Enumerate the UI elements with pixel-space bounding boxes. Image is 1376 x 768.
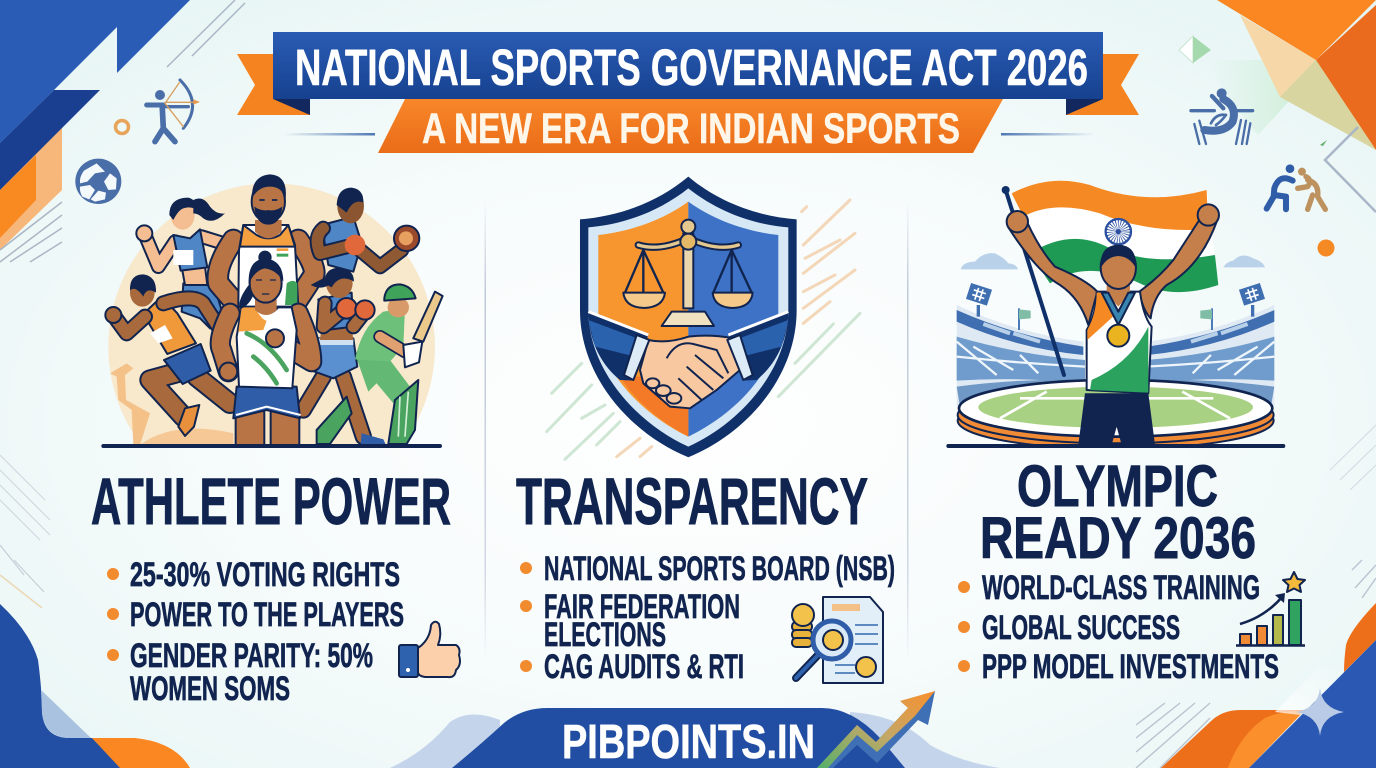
ground line	[103, 440, 440, 452]
bullet list: WOMEN SOMS	[130, 670, 290, 708]
motion stripes	[547, 200, 860, 459]
athletics track and field	[958, 380, 1274, 449]
handshake	[588, 310, 788, 408]
scales of justice	[623, 220, 753, 326]
corner decoration: bottom left	[0, 455, 190, 768]
corner decoration: top right	[1179, 0, 1376, 256]
bullet list	[520, 550, 895, 686]
bullet list: 25-30% VOTING RIGHTS	[130, 556, 400, 594]
ground line	[948, 440, 1283, 452]
bullet list	[958, 569, 1279, 686]
bullet list: ELECTIONS	[544, 616, 666, 654]
bullet list	[107, 556, 404, 708]
heading: OLYMPIC	[1017, 454, 1218, 519]
icon: gymnast	[1191, 88, 1253, 144]
Indian flag	[1012, 181, 1218, 292]
subtitle text: A NEW ERA FOR INDIAN SPORTS	[422, 105, 960, 153]
illustration: olympic athlete with flag	[948, 181, 1283, 449]
icon: football	[75, 159, 121, 204]
panel: olympic ready 2036: READY 2036	[980, 506, 1256, 571]
bullet list: NATIONAL SPORTS BOARD (NSB)	[544, 550, 895, 588]
panel: olympic ready 2036	[958, 454, 1305, 686]
bullet list: GLOBAL SUCCESS	[982, 609, 1180, 647]
icon: thumbs up	[399, 622, 460, 677]
corner decoration: bottom right	[1136, 560, 1376, 768]
figure: front female athlete	[219, 251, 312, 450]
illustration: athletes group	[103, 174, 443, 450]
icon: wrestlers	[1267, 164, 1325, 209]
bullet list: FAIR FEDERATION	[544, 588, 740, 626]
monument silhouette	[110, 363, 150, 445]
athlete	[1007, 204, 1219, 445]
heading: TRANSPARENCY	[516, 464, 868, 538]
decorative lines on right edge	[1330, 425, 1376, 490]
heading: ATHLETE POWER	[91, 464, 451, 538]
figure: bearded athlete	[218, 174, 314, 307]
icon: audit document with magnifier	[792, 597, 883, 683]
background sun	[108, 183, 435, 445]
figure: boxer	[303, 268, 386, 445]
illustration: shield with scales and handshake	[547, 177, 860, 459]
icon: archer	[147, 80, 200, 142]
panel: athlete power	[91, 464, 460, 708]
decorative orange ring	[116, 120, 128, 134]
figure: ball thrower	[317, 188, 419, 272]
bullet list: GENDER PARITY: 50%	[130, 637, 373, 675]
clouds	[961, 253, 1265, 269]
figure: male runner	[105, 274, 230, 436]
Ashoka chakra	[1106, 219, 1131, 244]
icon: rising arrow	[817, 691, 935, 768]
title banner	[237, 32, 1139, 153]
footer banner	[390, 691, 1000, 768]
footer text: PIBPOINTS.IN	[562, 716, 815, 768]
icon: growth bar chart with star	[1236, 572, 1305, 646]
stadium	[957, 285, 1274, 407]
shield body	[580, 177, 797, 457]
column dividers	[484, 200, 908, 660]
figure: female runner	[136, 198, 225, 328]
bullet list: POWER TO THE PLAYERS	[130, 596, 404, 634]
medal	[1107, 325, 1129, 347]
figure: cricketer	[317, 284, 443, 444]
flag pole	[1002, 186, 1064, 375]
bullet list: CAG AUDITS & RTI	[544, 648, 744, 686]
title text: NATIONAL SPORTS GOVERNANCE ACT 2026	[295, 39, 1088, 96]
panel: transparency	[516, 464, 895, 686]
corner decoration: top left	[0, 0, 245, 262]
